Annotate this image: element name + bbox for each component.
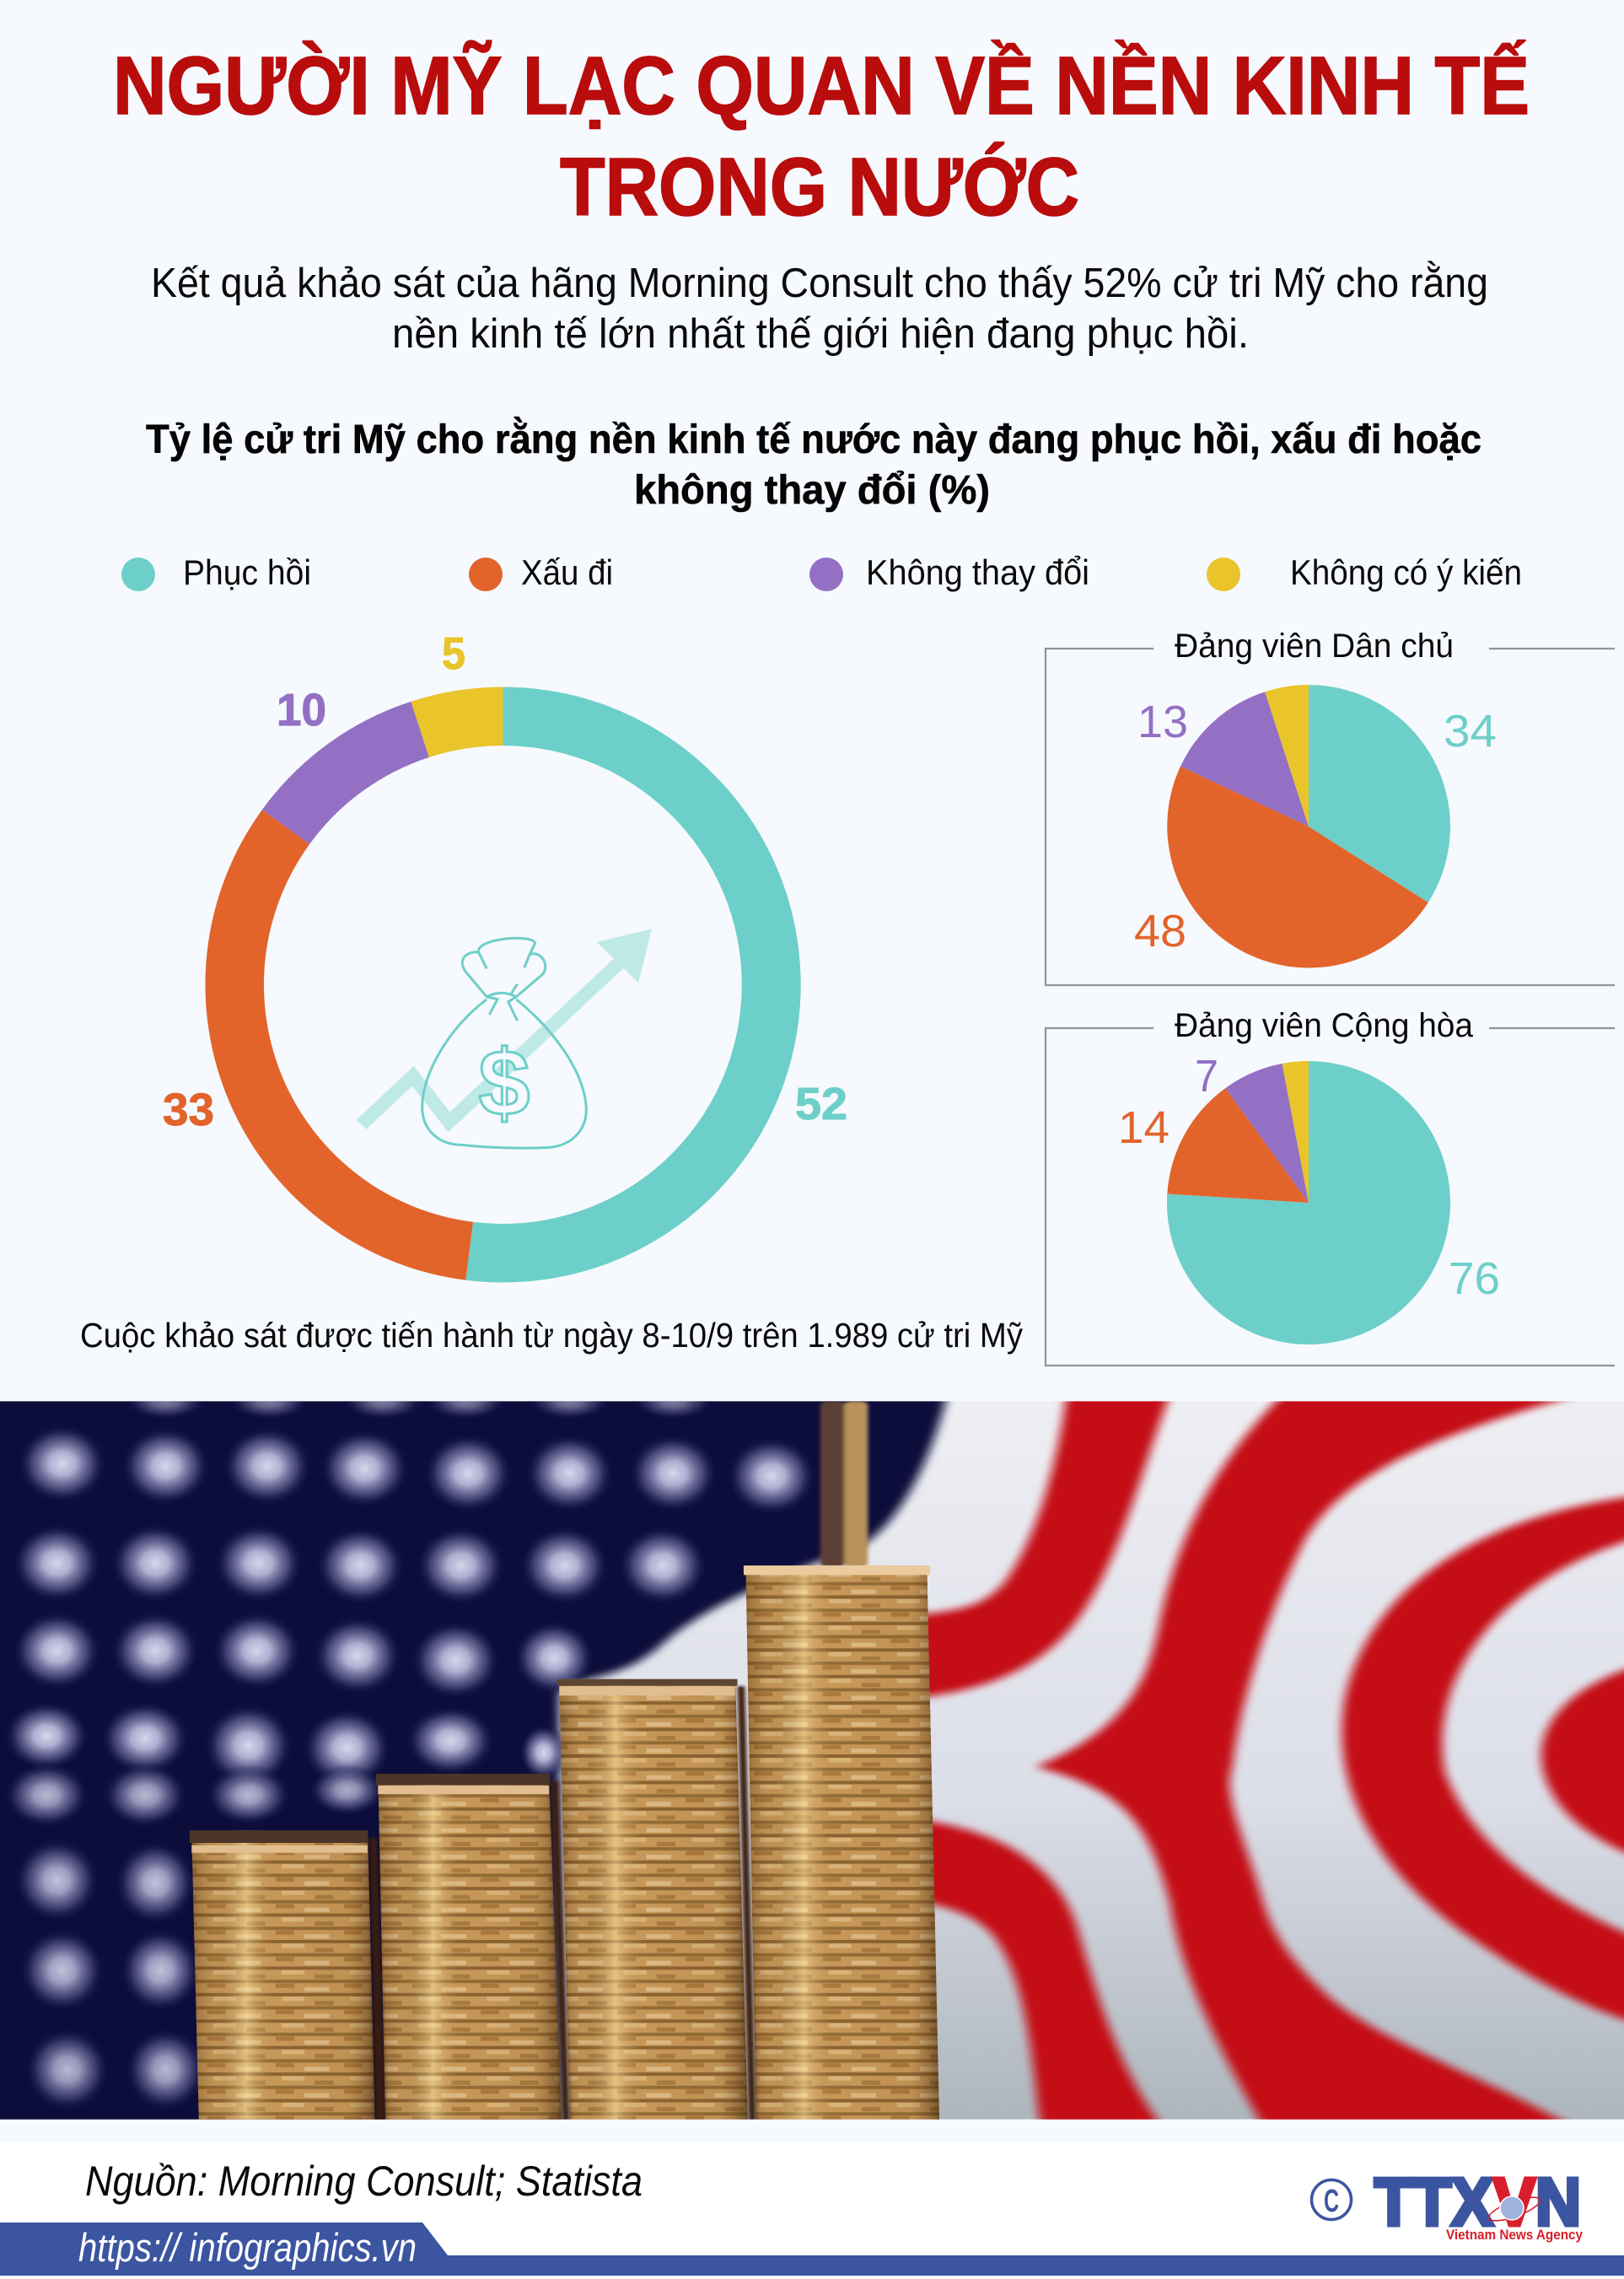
icon: money bag with rising arrow	[362, 929, 652, 1148]
donut value labels: 52	[795, 1079, 847, 1129]
pie chart: Republicans	[1167, 1061, 1450, 1344]
title	[113, 40, 1530, 233]
legend: Xấu đi	[521, 552, 613, 592]
pie labels: Democrats: 48	[1134, 906, 1186, 956]
coin standing on top	[820, 1401, 868, 1567]
legend	[121, 552, 1522, 592]
donut segment: recovering 52	[465, 687, 801, 1282]
footer white band	[0, 2142, 1624, 2279]
flag stripes	[911, 1393, 1624, 2131]
pie labels: Republicans: 76	[1449, 1253, 1500, 1304]
icon: copyright: C	[1324, 2184, 1339, 2219]
flag stars	[3, 1382, 817, 2112]
pie labels: Republicans: 14	[1118, 1102, 1170, 1153]
chart heading	[146, 416, 1481, 513]
intro text: Kết quả khảo sát của hãng Morning Consult cho thấy 52% cử tri Mỹ cho rằng	[151, 261, 1488, 306]
logo globe	[1487, 2193, 1542, 2225]
donut value labels: 5	[442, 628, 465, 679]
donut segment: unchanged 10	[262, 702, 429, 844]
icon: money bag with rising arrow: $	[478, 1032, 530, 1135]
survey note: Cuộc khảo sát được tiến hành từ ngày 8-10/9 trên 1.989 cử tri Mỹ	[80, 1316, 1023, 1355]
footer blue bar	[0, 2222, 1624, 2276]
donut segment: no opinion 5	[411, 687, 503, 757]
panel title: Republicans: Đảng viên Cộng hòa	[1175, 1007, 1474, 1044]
photo: coin stacks in front of US flag	[0, 1401, 1624, 2120]
pie labels: Democrats	[1134, 697, 1497, 956]
pie labels: Republicans	[1118, 1051, 1500, 1304]
website url: https:// infographics.vn	[78, 2225, 417, 2270]
panel: Republicans	[1046, 1007, 1615, 1366]
logo: TTXVN	[1312, 2164, 1583, 2243]
coin stack 3	[557, 1679, 748, 2122]
logo tagline: Vietnam News Agency	[1446, 2227, 1583, 2243]
panel: Democrats	[1046, 628, 1615, 985]
legend: Không thay đổi	[866, 552, 1089, 592]
legend: Không có ý kiến	[1290, 552, 1522, 592]
panel title: Democrats: Đảng viên Dân chủ	[1175, 628, 1454, 665]
legend: Phục hồi	[183, 552, 311, 592]
coin stack 4	[744, 1565, 939, 2122]
chart heading: không thay đổi (%)	[634, 468, 990, 513]
pie labels: Democrats: 13	[1137, 697, 1188, 747]
title: TRONG NƯỚC	[560, 141, 1079, 233]
chart heading: Tỷ lệ cử tri Mỹ cho rằng nền kinh tế nước này đang phục hồi, xấu đi hoặc	[146, 416, 1481, 462]
donut value labels	[163, 628, 847, 1135]
pie labels: Democrats: 34	[1444, 706, 1497, 757]
source text: Nguồn: Morning Consult; Statista	[85, 2158, 643, 2205]
pie labels: Republicans: 7	[1195, 1051, 1218, 1102]
flag canton	[0, 1393, 948, 2131]
donut value labels: 33	[163, 1085, 214, 1135]
coin stack 2	[376, 1774, 562, 2122]
donut chart: all voters	[163, 628, 847, 1282]
coin stack 1	[190, 1830, 375, 2122]
pie chart: Democrats	[1167, 685, 1450, 967]
donut segment: worse 33	[205, 810, 473, 1280]
intro text	[151, 261, 1488, 357]
intro text: nền kinh tế lớn nhất thế giới hiện đang phục hồi.	[392, 311, 1249, 357]
donut value labels: 10	[277, 685, 326, 735]
dark gaps between coin stacks	[370, 1686, 756, 2122]
logo wordmark: TTXVN	[1374, 2164, 1581, 2239]
icon: copyright	[1312, 2179, 1351, 2220]
